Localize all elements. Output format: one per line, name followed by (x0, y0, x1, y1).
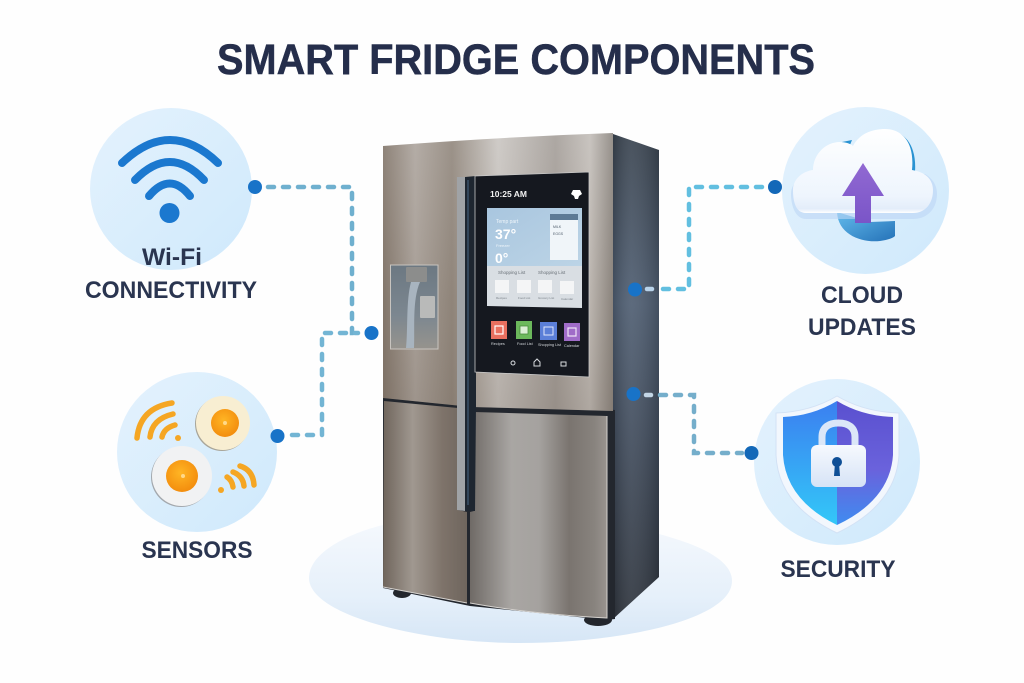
door handle (457, 176, 476, 511)
icon: sensors (117, 372, 277, 532)
app tiles: Calendar (564, 344, 580, 348)
label: Wi-Fi connectivity (85, 244, 257, 304)
label: cloud updates: CLOUD (821, 282, 903, 309)
screen note card: EGGS (553, 232, 564, 236)
fridge side panel (613, 134, 659, 619)
fridge feet (393, 588, 612, 626)
screen panel: temperature: 37° (495, 226, 516, 242)
screen panel: shopping list: Shopping List (498, 270, 526, 275)
connector: sensors to fridge (270, 326, 378, 443)
screen panel: shopping list: Recipes (496, 296, 507, 300)
connector: fridge to security (626, 387, 758, 460)
screen panel: shopping list: Calendar (561, 297, 573, 301)
label: Wi-Fi connectivity: CONNECTIVITY (85, 277, 257, 304)
clock: 10:25 AM (490, 189, 527, 199)
screen panel: temperature: Temp part (496, 219, 519, 225)
label: Wi-Fi connectivity: Wi-Fi (142, 244, 202, 271)
screen panel: shopping list: Grocery List (538, 296, 554, 300)
label: sensors: SENSORS (142, 537, 252, 564)
screen panel: shopping list: Shopping List (538, 270, 566, 275)
screen panel: temperature (487, 208, 582, 266)
screen panel: temperature: Freezer (496, 243, 510, 248)
connector: fridge to cloud (628, 180, 782, 296)
icon: cloud updates (782, 107, 949, 274)
status icon (571, 190, 582, 199)
floor ellipse (309, 525, 732, 643)
lower left door (383, 401, 467, 603)
screen panel: shopping list: Food List (518, 296, 531, 300)
app tiles: Shopping List (538, 343, 562, 347)
label: cloud updates: UPDATES (808, 314, 916, 341)
connector: Wi-Fi to fridge (248, 180, 360, 333)
upper door frame (383, 133, 613, 411)
smart fridge (383, 133, 659, 626)
icon: Wi-Fi (90, 108, 252, 270)
label: cloud updates (808, 282, 916, 341)
app tiles: Food List (517, 342, 534, 346)
title: SMART FRIDGE COMPONENTS (217, 36, 815, 84)
screen note card: MILK (553, 225, 562, 229)
navigation icons (511, 359, 566, 366)
screen note card (550, 214, 578, 260)
lower right door (470, 412, 607, 618)
water dispenser (390, 265, 438, 349)
label: security: SECURITY (780, 556, 896, 583)
app tiles: Recipes (491, 342, 505, 346)
touchscreen (475, 172, 589, 377)
screen panel: shopping list (487, 266, 582, 308)
screen panel: temperature: 0° (495, 250, 508, 266)
icon: security shield (754, 379, 920, 545)
app tiles (491, 321, 580, 348)
fridge dark body (383, 396, 615, 620)
